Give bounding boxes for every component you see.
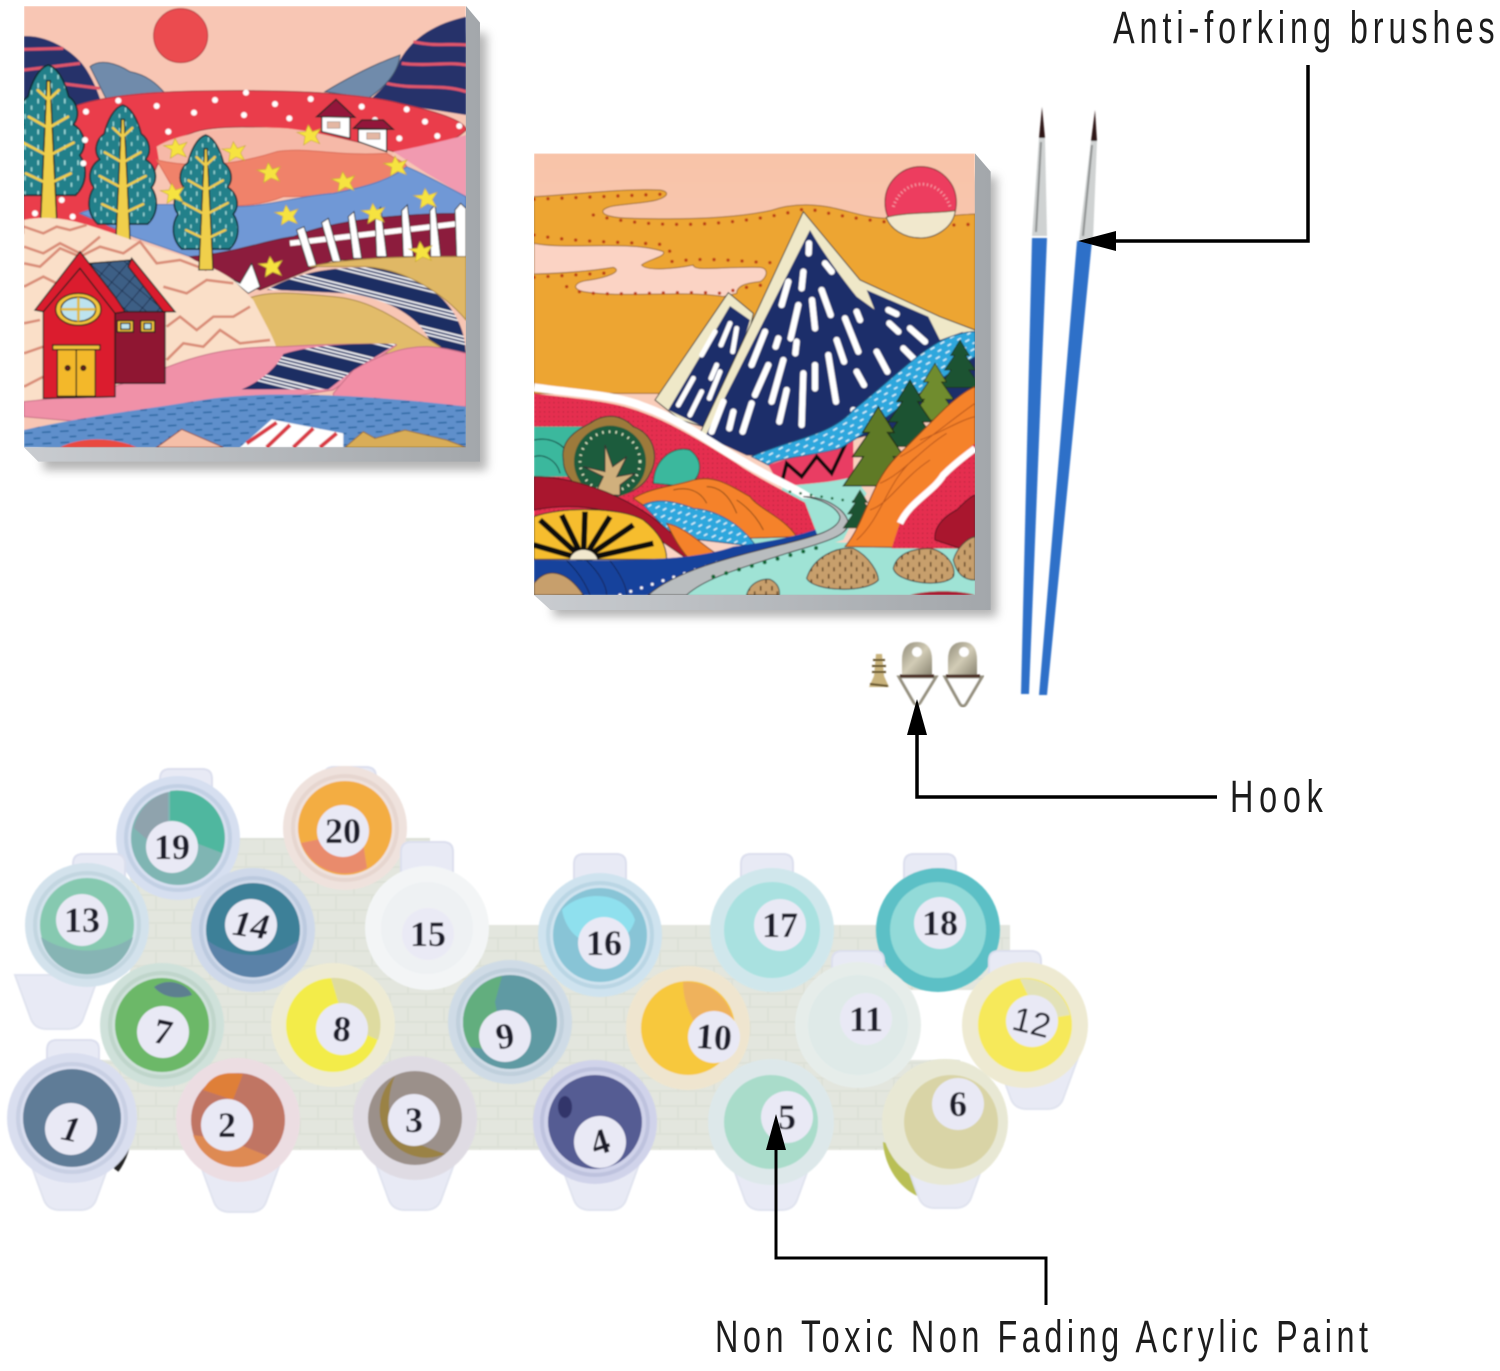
pot 5: 5 [778,1097,796,1137]
label: non toxic non fading acrylic paint: Non Toxic Non Fading Acrylic Paint [715,1313,1368,1362]
pot 19: 19 [154,827,190,867]
pot 12 [962,951,1088,1109]
pot 16 [538,854,662,997]
pot 9: 9 [493,1015,517,1057]
pot 10: 10 [695,1016,733,1058]
pot 15 [365,842,489,990]
pot 4 [533,1060,657,1210]
pot 17 [710,854,834,992]
label: anti-forking brushes: Anti-forking brushes [1113,4,1495,53]
arrow: hook leader [907,699,1217,797]
icon: screw and hanging hooks [869,642,982,706]
icon: paint brushes [1021,107,1097,695]
pot 3 [353,1056,477,1210]
pot 16: 16 [586,923,622,963]
pot 19 [116,769,240,900]
arrow: anti-forking brushes leader [1078,65,1308,251]
pot 2: 2 [218,1105,236,1145]
pot 6: 6 [949,1084,967,1124]
label: hook: Hook [1230,773,1323,822]
pot 1 [7,1040,137,1210]
pot 20 [283,766,407,890]
pot 4: 4 [585,1120,615,1164]
pot 13: 13 [64,900,100,940]
pot 17: 17 [762,905,798,945]
pot 2 [176,1058,300,1212]
pot 6 [882,1059,1008,1208]
pot 8 [271,963,395,1087]
pot 18 [876,854,1000,992]
painting: village landscape canvas [11,6,487,470]
pot 1: 1 [58,1108,84,1150]
paint pots [7,766,1088,1212]
pot 18: 18 [922,903,958,943]
pot 11: 11 [849,999,883,1039]
pot 3: 3 [405,1100,423,1140]
pot 7 [100,963,224,1087]
pot 13 [15,854,149,1029]
pot 7: 7 [150,1011,176,1053]
pot 12: 12 [1009,1000,1054,1046]
pot 11 [795,951,921,1088]
pot 5 [708,1059,834,1210]
pot 8: 8 [331,1008,353,1050]
arrow: acrylic paint leader [766,1114,1046,1305]
pot 10 [626,966,750,1090]
pot 15: 15 [410,914,446,954]
paint tray [90,838,1010,1150]
painting: mountain landscape canvas [534,153,997,617]
pot 20: 20 [325,811,361,851]
pot 14: 14 [230,903,272,947]
pot 14 [191,868,315,992]
pot 9 [448,960,572,1084]
